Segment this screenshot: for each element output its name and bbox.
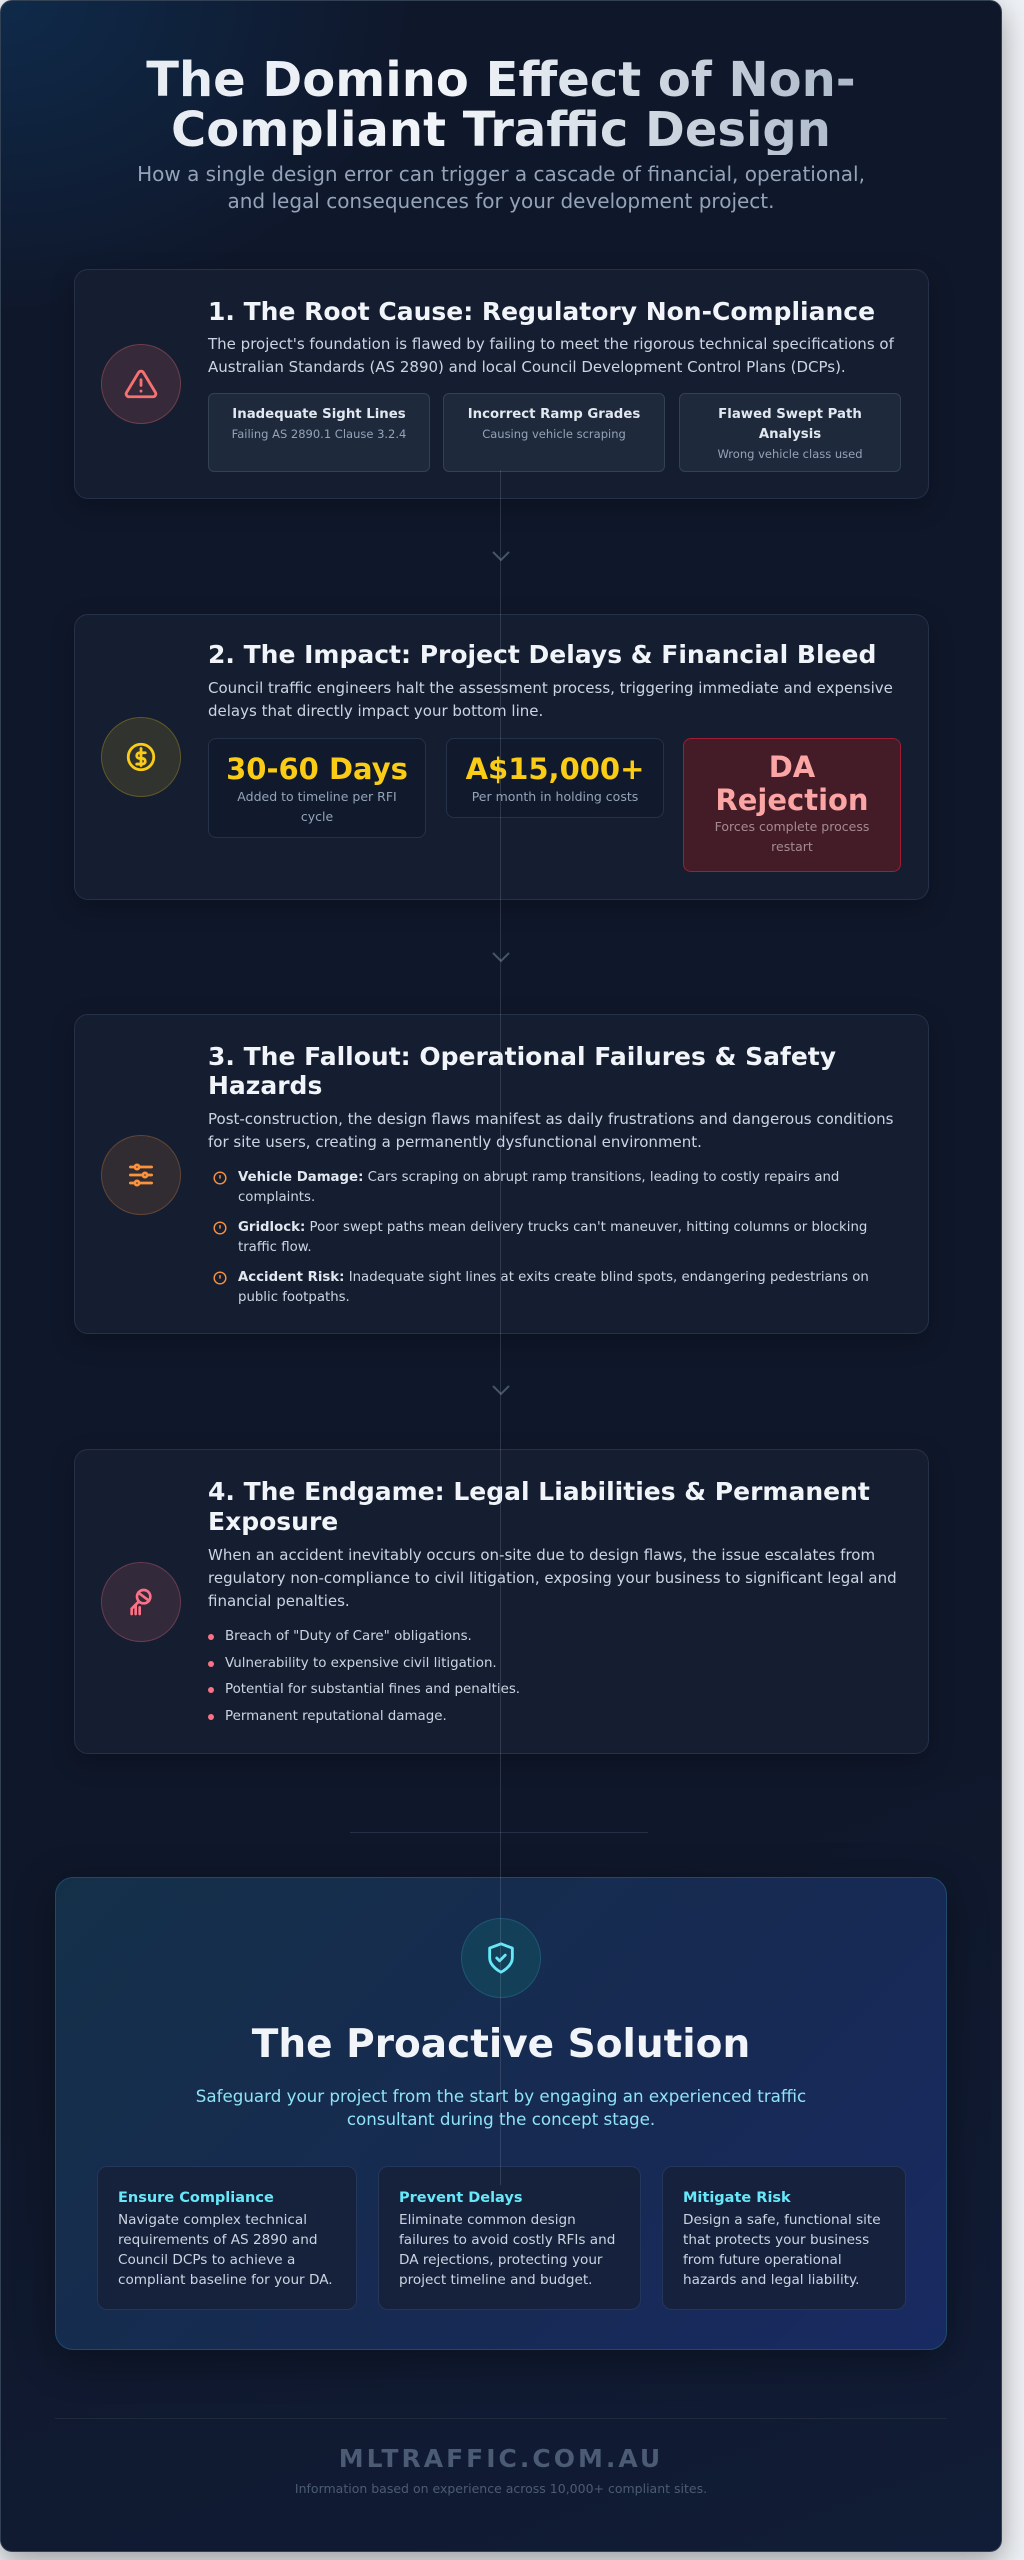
box: ramp grades: Causing vehicle scraping bbox=[482, 427, 626, 441]
box: swept path: Wrong vehicle class used bbox=[717, 447, 863, 461]
stat: DA rejection: restart bbox=[771, 839, 813, 854]
box: sight lines bbox=[208, 393, 430, 472]
stat: cost: Per month in holding costs bbox=[472, 789, 638, 804]
stat: cost: A$15,000+ bbox=[466, 752, 644, 786]
heading: solution: The Proactive Solution bbox=[252, 2022, 750, 2067]
box: ramp grades: Incorrect Ramp Grades bbox=[468, 407, 640, 422]
text: solution: Safeguard your project from the start by engaging an experienced traffic bbox=[196, 2086, 806, 2106]
bullet: accident risk: Accident Risk: Inadequate sight lines at exits create blind spots, endangering pedestrians on public footpaths. bbox=[238, 1270, 869, 1305]
arrow 3 bbox=[492, 1385, 510, 1396]
text: solution: consultant during the concept stage. bbox=[347, 2109, 655, 2129]
title: The Domino Effect of Non- bbox=[146, 52, 856, 108]
stat: days bbox=[208, 738, 426, 838]
icon: warning bbox=[101, 344, 181, 424]
subtitle bbox=[137, 162, 865, 213]
stat: cost bbox=[446, 738, 664, 818]
stat: days: cycle bbox=[301, 809, 333, 824]
panel: endgame bbox=[74, 1449, 929, 1754]
box: swept path: Flawed Swept Path bbox=[718, 407, 862, 422]
box: ensure compliance bbox=[97, 2166, 357, 2310]
text: endgame: When an accident inevitably occurs on-site due to design flaws, the issue escalates from regulatory non-compliance to civil litigation, exposing your business to significant legal and financial penalties. bbox=[208, 1546, 897, 1610]
icon: legal bbox=[101, 1562, 181, 1642]
heading: root cause: 1. The Root Cause: Regulatory Non-Compliance bbox=[208, 297, 875, 326]
stat: DA rejection: Forces complete process bbox=[715, 819, 869, 834]
icon: money bbox=[101, 717, 181, 797]
box: prevent delays: Eliminate common design failures to avoid costly RFIs and DA rejections, protecting your project timeline and budget. bbox=[399, 2212, 615, 2288]
box: mitigate risk: Mitigate Risk bbox=[683, 2190, 791, 2206]
text: solution bbox=[196, 2086, 806, 2129]
box: ensure compliance: Ensure Compliance bbox=[118, 2190, 274, 2206]
stat: days: 30-60 Days bbox=[226, 752, 408, 786]
box: mitigate risk bbox=[662, 2166, 906, 2310]
bullet: vehicle damage: Vehicle Damage: Cars scraping on abrupt ramp transitions, leading to costly repairs and complaints. bbox=[238, 1170, 839, 1205]
footer: note: Information based on experience across 10,000+ compliant sites. bbox=[295, 2481, 707, 2496]
heading: endgame: 4. The Endgame: Legal Liabilities & Permanent Exposure bbox=[208, 1477, 870, 1536]
heading: impact: 2. The Impact: Project Delays & Financial Bleed bbox=[208, 640, 876, 669]
list: consequences bbox=[208, 1629, 520, 1724]
title bbox=[0, 55, 1002, 155]
panel: impact bbox=[74, 614, 929, 900]
list: consequences: Potential for substantial fines and penalties. bbox=[225, 1682, 520, 1697]
box: sight lines: Failing AS 2890.1 Clause 3.2.4 bbox=[232, 427, 406, 441]
box: swept path bbox=[679, 393, 901, 472]
footer: brand: MLTRAFFIC.COM.AU bbox=[339, 2444, 663, 2473]
bullet: gridlock: Gridlock: Poor swept paths mean delivery trucks can't maneuver, hitting columns or blocking traffic flow. bbox=[238, 1220, 867, 1255]
box: ramp grades bbox=[443, 393, 665, 472]
arrow 1 bbox=[492, 551, 510, 562]
title: Compliant Traffic Design bbox=[171, 102, 831, 158]
icon: shield bbox=[461, 1918, 541, 1998]
box: prevent delays bbox=[378, 2166, 641, 2310]
subtitle: and legal consequences for your development project. bbox=[227, 189, 775, 213]
stat: DA rejection: Rejection bbox=[715, 783, 869, 817]
list: consequences: Permanent reputational damage. bbox=[225, 1709, 447, 1724]
box: sight lines: Inadequate Sight Lines bbox=[232, 407, 406, 422]
stat: DA rejection: DA bbox=[769, 750, 815, 784]
list: consequences: Vulnerability to expensive civil litigation. bbox=[225, 1656, 497, 1671]
stat: DA rejection bbox=[683, 738, 901, 872]
icon: sliders bbox=[101, 1135, 181, 1215]
box: swept path: Analysis bbox=[759, 427, 821, 442]
box: mitigate risk: Design a safe, functional site that protects your business from future operational hazards and legal liability. bbox=[683, 2212, 881, 2288]
panel: fallout bbox=[74, 1014, 929, 1334]
panel: proactive solution bbox=[55, 1877, 947, 2350]
stat: days: Added to timeline per RFI bbox=[237, 789, 397, 804]
subtitle: How a single design error can trigger a cascade of financial, operational, bbox=[137, 162, 865, 186]
panel: root cause bbox=[74, 269, 929, 499]
text: root cause: The project's foundation is flawed by failing to meet the rigorous technical specifications of Australian Standards (AS 2890) and local Council Development Control Plans (DCPs). bbox=[208, 335, 894, 376]
text: fallout: Post-construction, the design flaws manifest as daily frustrations and dangerous conditions for site users, creating a permanently dysfunctional environment. bbox=[208, 1110, 894, 1151]
box: ensure compliance: Navigate complex technical requirements of AS 2890 and Council DCPs to achieve a compliant baseline for your DA. bbox=[118, 2212, 333, 2288]
box: prevent delays: Prevent Delays bbox=[399, 2190, 522, 2206]
arrow 2 bbox=[492, 952, 510, 962]
heading: fallout: 3. The Fallout: Operational Failures & Safety Hazards bbox=[208, 1042, 836, 1100]
text: impact: Council traffic engineers halt the assessment process, triggering immediate and expensive delays that directly impact your bottom line. bbox=[208, 679, 893, 720]
list: consequences: Breach of "Duty of Care" obligations. bbox=[225, 1629, 472, 1644]
